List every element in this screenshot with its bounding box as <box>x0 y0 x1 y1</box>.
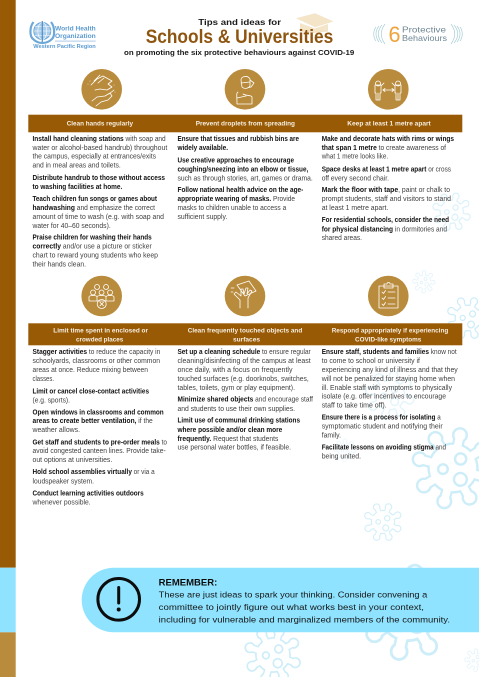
tips text: once daily, with a focus on frequently <box>178 367 293 374</box>
tips text <box>32 349 167 506</box>
tips text: weather allows. <box>32 427 80 434</box>
icon: two people one metre apart <box>368 69 409 110</box>
tips text: correctly and/or use a picture or sticker <box>32 244 152 251</box>
tips text: Facilitate lessons on avoiding stigma and <box>322 444 446 451</box>
icon: wiping hand <box>225 276 265 316</box>
tips text: (e.g. sports). <box>32 397 70 404</box>
title line 1: Tips and ideas for <box>198 17 282 27</box>
tips text: Conduct learning activities outdoors <box>32 491 144 498</box>
tips text: where possible and/or clean more <box>177 427 282 434</box>
header text: Limit time spent in enclosed or <box>53 327 148 334</box>
tips text: Set up a cleaning schedule to ensure regular <box>178 349 311 356</box>
tips text: sufficient supply. <box>178 214 227 221</box>
background virus pattern <box>237 187 479 677</box>
WHO wordmark: World Health <box>55 26 96 32</box>
tips text: Minimize shared objects and encourage staff <box>178 397 313 404</box>
callout text: These are just ideas to spark your thinking. Consider convening a <box>159 590 427 600</box>
title line 2: Schools & Universities <box>146 26 333 48</box>
tips text: loudspeaker system. <box>32 478 94 485</box>
tips text: for physical distancing in dormitories and <box>322 226 447 233</box>
tips text: Limit use of communal drinking stations <box>178 418 300 425</box>
tips text: Make and decorate hats with rims or wings <box>322 136 454 143</box>
panel: clean frequently touched objects <box>177 276 313 451</box>
header text: Keep at least 1 metre apart <box>347 120 431 127</box>
header text: Prevent droplets from spreading <box>196 120 295 127</box>
callout text <box>159 590 450 625</box>
tips text: handwashing and emphasize the correct <box>32 205 155 212</box>
tips text: Follow national health advice on the age- <box>178 187 304 194</box>
WHO wordmark: Organization <box>55 33 96 40</box>
tips text: Install hand cleaning stations with soap and <box>32 136 166 143</box>
header band: row 2 <box>28 323 462 345</box>
tips text <box>32 136 167 269</box>
logo numeral and words: 6 <box>388 22 400 47</box>
tips text: ill. Enable staff with symptoms to physically <box>322 385 452 392</box>
left colour bar <box>0 0 16 677</box>
header text <box>188 327 302 343</box>
tips text: the campus, especially at entrances/exits <box>32 154 156 161</box>
tips text: chart to reward young students who keep <box>32 253 158 260</box>
tips text: avoid congested canteen lines. Provide take- <box>32 448 166 455</box>
tips text: classes. <box>32 376 54 383</box>
icon: person coughing into elbow <box>225 69 265 110</box>
tips text: will not be penalized for staying home when <box>321 376 455 383</box>
header text: crowded places <box>76 336 124 343</box>
tips text: to washing facilities at home. <box>32 184 122 191</box>
logo numeral and words <box>388 22 447 47</box>
tips text: Teach children fun songs or games about <box>32 196 158 203</box>
tips text: Get staff and students to pre-order meals to <box>32 439 167 446</box>
logo arcs <box>374 24 462 44</box>
tips text: and students to use their own supplies. <box>178 406 295 413</box>
subtitle: on promoting the six protective behaviours against COVID-19 <box>124 48 354 57</box>
tips text: widely available. <box>177 145 228 152</box>
tips text: being united. <box>322 453 361 460</box>
tips text: cleaning/disinfecting of the campus at least <box>178 358 311 365</box>
tips text: Ensure staff, students and families know not <box>322 349 457 356</box>
tips text: and in meal areas and toilets. <box>32 163 121 170</box>
tips text: Use creative approaches to encourage <box>178 157 294 164</box>
header text: Clean hands regularly <box>67 120 133 127</box>
tips text: at least 1 metre apart. <box>322 205 388 212</box>
logo numeral and words: Behaviours <box>402 34 447 43</box>
tips text: shared areas. <box>322 235 362 242</box>
callout background <box>82 568 479 632</box>
icon: graduation cap <box>296 13 334 33</box>
tips text: coughing/sneezing into an elbow or tissue, <box>178 166 308 173</box>
WHO wordmark <box>33 26 96 50</box>
tips text: whenever possible. <box>32 499 91 506</box>
tips text: schoolyards, classrooms or other common <box>32 358 160 365</box>
icon: WHO emblem <box>30 21 54 43</box>
6 Protective Behaviours logo <box>374 22 462 47</box>
header band: row 1 <box>28 115 462 132</box>
tips text: staff to take time off). <box>322 402 387 409</box>
panel: respond to COVID-like symptoms <box>321 276 458 460</box>
tips text: out options at universities. <box>32 457 112 464</box>
logo numeral and words: Protective <box>402 26 447 34</box>
tips text: Ensure there is a process for isolating a <box>322 414 441 421</box>
tips text: use personal water bottles, if feasible. <box>178 444 291 451</box>
tips text: water for 40–60 seconds). <box>32 223 111 230</box>
icon: exclamation mark <box>98 578 140 620</box>
tips text: Mark the floor with tape, paint or chalk to <box>322 187 450 194</box>
header text: Clean frequently touched objects and <box>188 327 302 334</box>
header text: surfaces <box>233 336 260 343</box>
tips text <box>321 349 458 460</box>
tips text: off every second chair. <box>322 175 389 182</box>
callout text: committee to jointly figure out what works best in your context, <box>159 602 424 612</box>
icon: clipboard checklist <box>368 276 409 316</box>
tips text: Limit or cancel close-contact activities <box>32 388 149 395</box>
panel: keep at least 1 metre apart <box>321 69 454 242</box>
icon: washing hands <box>81 69 122 110</box>
tips text: tables, toilets, gym or play equipment). <box>178 385 295 392</box>
WHO wordmark: Western Pacific Region <box>33 44 96 50</box>
tips text: isolate (e.g. offer incentives to encourage <box>322 393 446 400</box>
tips text: family. <box>322 432 341 439</box>
tips text: to come to school or university if <box>322 358 420 365</box>
panel: limit time in enclosed places <box>32 276 167 506</box>
tips text: symptomatic student and notifying their <box>322 423 443 430</box>
tips text: such as through stories, art, games or drama. <box>178 175 313 182</box>
callout heading: REMEMBER: <box>159 577 217 587</box>
tips text <box>321 136 454 242</box>
title <box>124 13 354 57</box>
header text <box>332 327 448 343</box>
header text <box>53 327 148 343</box>
callout text: including for vulnerable and marginalized members of the community. <box>159 615 450 625</box>
tips text: that span 1 metre to create awareness of <box>322 145 446 152</box>
tips text: Ensure that tissues and rubbish bins are <box>178 136 299 143</box>
icon: crowd of people <box>81 276 122 316</box>
header text: COVID-like symptoms <box>355 336 421 343</box>
tips text: amount of time to wash (e.g. with soap and <box>32 214 164 221</box>
callout: remember <box>82 568 479 632</box>
tips text: experiencing any kind of illness and that they <box>322 367 458 374</box>
header text: Respond appropriately if experiencing <box>332 327 448 334</box>
tips text: areas at once. Reduce mixing between <box>32 367 148 374</box>
tips text: For residential schools, consider the need <box>322 217 449 224</box>
tips text: Hold school assemblies virtually or via a <box>32 469 155 476</box>
tips text: water or alcohol-based handrub) throughout <box>32 145 167 152</box>
tips text: frequently. Request that students <box>178 436 279 443</box>
tips text: Praise children for washing their hands <box>32 235 152 242</box>
tips text: what 1 metre looks like. <box>321 154 388 161</box>
tips text: prompt students, staff and visitors to stand <box>322 196 451 203</box>
tips text: masks to children unable to access a <box>178 205 286 212</box>
tips text <box>177 349 313 451</box>
panel: prevent droplets from spreading <box>177 69 313 221</box>
tips text: touched surfaces (e.g. doorknobs, switches, <box>178 376 309 383</box>
tips text: Distribute handrub to those without access <box>32 175 165 182</box>
tips text: Stagger activities to reduce the capacity in <box>32 349 160 356</box>
WHO logo <box>30 21 96 50</box>
panel: clean hands regularly <box>32 69 167 269</box>
tips text: Open windows in classrooms and common <box>32 409 164 416</box>
tips text: areas to create better ventilation, if the <box>32 418 153 425</box>
tips text: appropriate wearing of masks. Provide <box>178 196 295 203</box>
tips text: Space desks at least 1 metre apart or cross <box>322 166 451 173</box>
tips text <box>177 136 313 221</box>
tips text: their hands clean. <box>32 262 86 269</box>
